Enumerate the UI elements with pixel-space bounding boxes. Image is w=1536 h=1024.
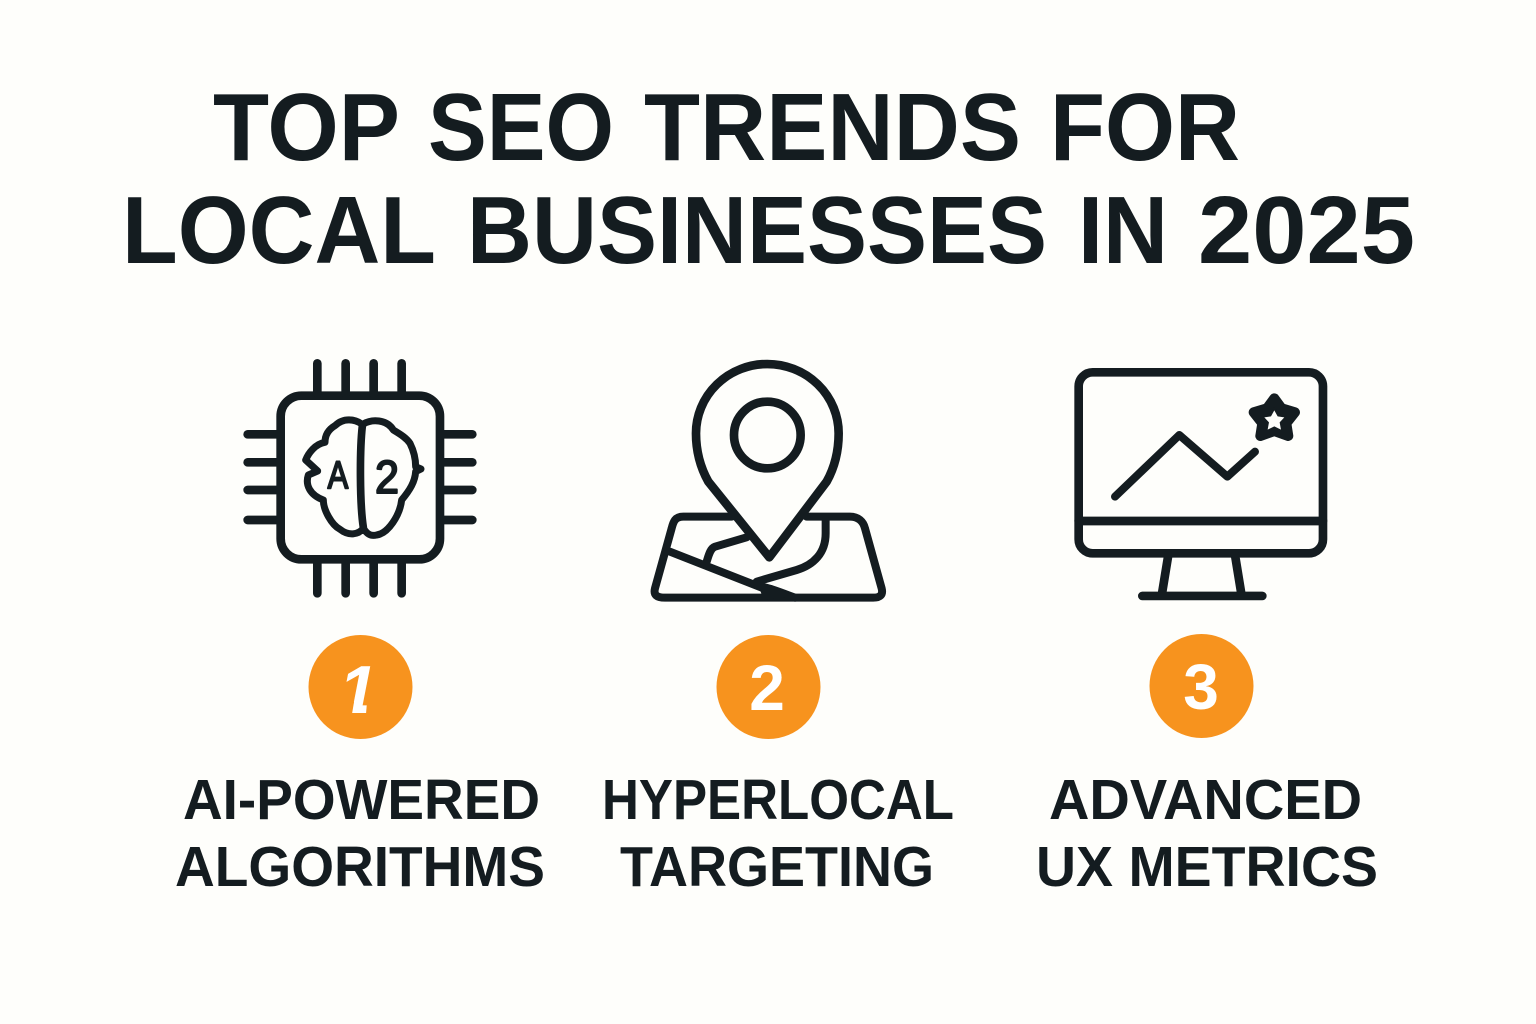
title: FOR [1050, 74, 1240, 181]
panel: hyperlocal targeting [602, 364, 954, 899]
icon: AI brain chip: 2 [375, 451, 399, 503]
number badge 2: 2 [749, 652, 785, 724]
label: advanced UX metrics: ADVANCED [1049, 768, 1362, 832]
number badge 1: 1 [339, 652, 377, 728]
icon: monitor with rising chart and star [1079, 372, 1323, 596]
label: AI-powered algorithms: AI-POWERED [183, 768, 540, 832]
title: LOCAL [122, 177, 436, 284]
title: 2025 [1198, 177, 1415, 284]
title: BUSINESSES [467, 177, 1047, 284]
title [122, 74, 1415, 284]
label: hyperlocal targeting [602, 768, 954, 899]
icon: AI brain chip [248, 363, 472, 593]
label: hyperlocal targeting: TARGETING [620, 835, 934, 899]
icon: map pin on map [655, 364, 882, 599]
number badge 3: 3 [1183, 651, 1219, 723]
title: SEO [428, 74, 614, 181]
label: advanced UX metrics: UX METRICS [1036, 835, 1378, 899]
title: TRENDS [644, 74, 1021, 181]
label: AI-powered algorithms: ALGORITHMS [175, 835, 545, 899]
number badge 3 [1150, 634, 1254, 738]
number badge 1 [308, 635, 412, 739]
label: AI-powered algorithms [175, 768, 545, 899]
panel: advanced UX metrics [1036, 372, 1378, 899]
title: IN [1078, 177, 1168, 284]
label: advanced UX metrics [1036, 768, 1378, 899]
icon: AI brain chip: A [328, 453, 349, 497]
title: TOP [213, 74, 400, 181]
panel: AI-powered algorithms [175, 363, 545, 899]
number badge 2 [716, 635, 820, 739]
label: hyperlocal targeting: HYPERLOCAL [602, 768, 954, 832]
